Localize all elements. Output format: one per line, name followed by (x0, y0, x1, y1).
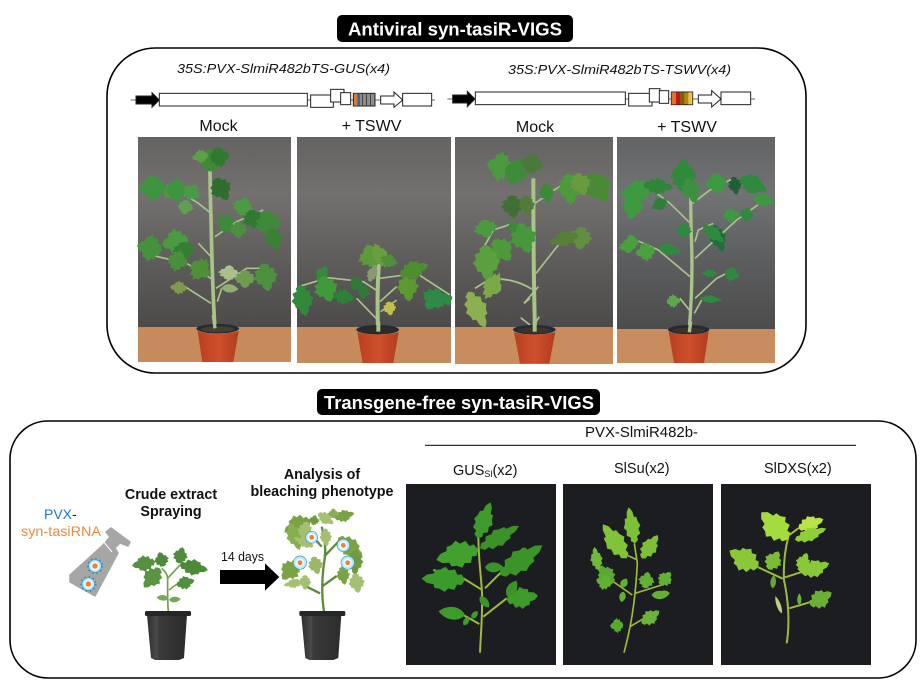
label: Crude extract Spraying: Spraying (140, 504, 202, 520)
label: 14 days: 14 days (221, 550, 264, 564)
photo: TSWV construct, mock-inoculated plant (455, 137, 619, 364)
label: Analysis of bleaching phenotype (250, 467, 394, 500)
bracket line over leaf photos (425, 445, 856, 446)
condition label: TSWV 1: + TSWV (342, 118, 402, 135)
label: Crude extract Spraying (125, 487, 217, 520)
panel outline (10, 421, 916, 678)
label: Crude extract Spraying: Crude extract (125, 487, 217, 503)
heading: Antiviral syn-tasiR-VIGS: Antiviral syn-tasiR-VIGS (348, 18, 562, 40)
label: GUS Sl (x2): GUS (453, 463, 484, 479)
label: PVX-: PVX- (44, 506, 77, 522)
label: GUS Sl (x2): (x2) (492, 463, 517, 479)
label: GUS Sl (x2): Sl (484, 469, 492, 479)
construct label: GUS: 35S:PVX-SlmiR482bTS-GUS(x4) (177, 61, 390, 76)
illustration: young plant in pot (131, 545, 209, 660)
label: SlDXS(x2): SlDXS(x2) (764, 461, 832, 477)
photo: GUS construct, TSWV-infected plant (289, 137, 455, 363)
photo: SlDXS leaf (721, 484, 871, 665)
icon: spray bottle with virus particles (70, 528, 130, 596)
heading: Transgene-free syn-tasiR-VIGS: Transgene-free syn-tasiR-VIGS (324, 392, 594, 413)
photo: SlSu leaf (563, 484, 713, 665)
condition label: Mock 1: Mock (199, 118, 239, 135)
panel outline (107, 48, 806, 373)
genome diagram: GUS construct (131, 89, 435, 107)
photo: GUS construct, mock-inoculated plant (135, 137, 291, 362)
label: Analysis of bleaching phenotype: bleaching phenotype (250, 484, 394, 500)
genome diagram: TSWV construct (447, 89, 755, 107)
condition label: Mock 2: Mock (516, 119, 555, 136)
label: PVX-SlmiR482b-: PVX-SlmiR482b- (585, 425, 698, 441)
label: SlSu(x2): SlSu(x2) (614, 461, 670, 477)
panel: antiviral syn-tasiR-VIGS (107, 48, 806, 373)
panel: transgene-free syn-tasiR-VIGS (10, 421, 916, 678)
label: Analysis of bleaching phenotype: Analysis of (284, 467, 360, 483)
photo: GUS Sl leaf (406, 484, 556, 665)
label: syn-tasiRNA: syn-tasiRNA (21, 523, 102, 539)
photo: TSWV construct, TSWV-infected plant (617, 137, 776, 363)
arrow: 14 days (220, 563, 279, 591)
construct label: TSWV: 35S:PVX-SlmiR482bTS-TSWV(x4) (508, 62, 731, 77)
illustration: bleached plant in pot with virus particles (274, 507, 369, 660)
condition label: TSWV 2: + TSWV (657, 119, 717, 136)
